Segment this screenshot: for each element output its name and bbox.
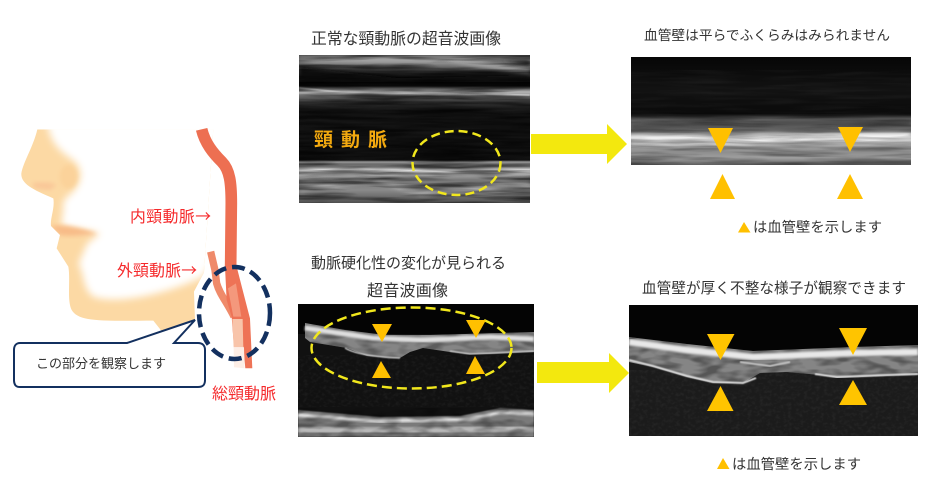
ultrasound: atherosclerosis (298, 304, 534, 437)
label: internal carotid: 内頸動脈→ (130, 204, 211, 227)
nostril shade (34, 182, 54, 190)
legend: markers indicate wall (bottom): は血管壁を示します (732, 453, 861, 474)
upper lip shade (51, 225, 97, 236)
label: external carotid: 外頸動脈→ (117, 258, 197, 281)
illustration: face profile and carotid artery (13, 128, 276, 401)
dashed ellipse: thickened wall (312, 308, 512, 388)
dashed ellipse: normal wall (412, 131, 500, 195)
heading: atherosclerosis ultrasound: 超音波画像 (367, 277, 448, 301)
callout: この部分を観察します: この部分を観察します (36, 353, 166, 372)
arrow: normal to detail (531, 124, 627, 164)
nose wing (60, 165, 77, 189)
label: common carotid: 総頸動脈 (212, 380, 276, 404)
carotid arteries (202, 129, 252, 368)
label: carotid in image: 頸動脈 (314, 125, 395, 152)
ultrasound: thickened wall detail (629, 305, 918, 436)
heading: atherosclerosis ultrasound: 動脈硬化性の変化が見られる (311, 252, 506, 273)
markers: thickened wall (372, 320, 486, 378)
face profile (21, 130, 214, 330)
ultrasound: normal wall detail (631, 57, 911, 165)
callout: この部分を観察します (14, 320, 205, 387)
ultrasound: normal carotid (299, 55, 530, 203)
dashed circle: observed region (199, 267, 270, 359)
legend: markers indicate wall (top): は血管壁を示します (753, 216, 882, 237)
markers: thickened wall detail (707, 328, 867, 411)
heading: wall thick: 血管壁が厚く不整な様子が観察できます (642, 277, 906, 298)
arrow: thickened to detail (537, 353, 629, 393)
heading: normal carotid ultrasound: 正常な頸動脈の超音波画像 (311, 26, 501, 49)
heading: atherosclerosis ultrasound (311, 252, 506, 301)
markers: normal wall detail (708, 127, 863, 199)
heading: wall flat: 血管壁は平らでふくらみはみられません (644, 24, 890, 44)
